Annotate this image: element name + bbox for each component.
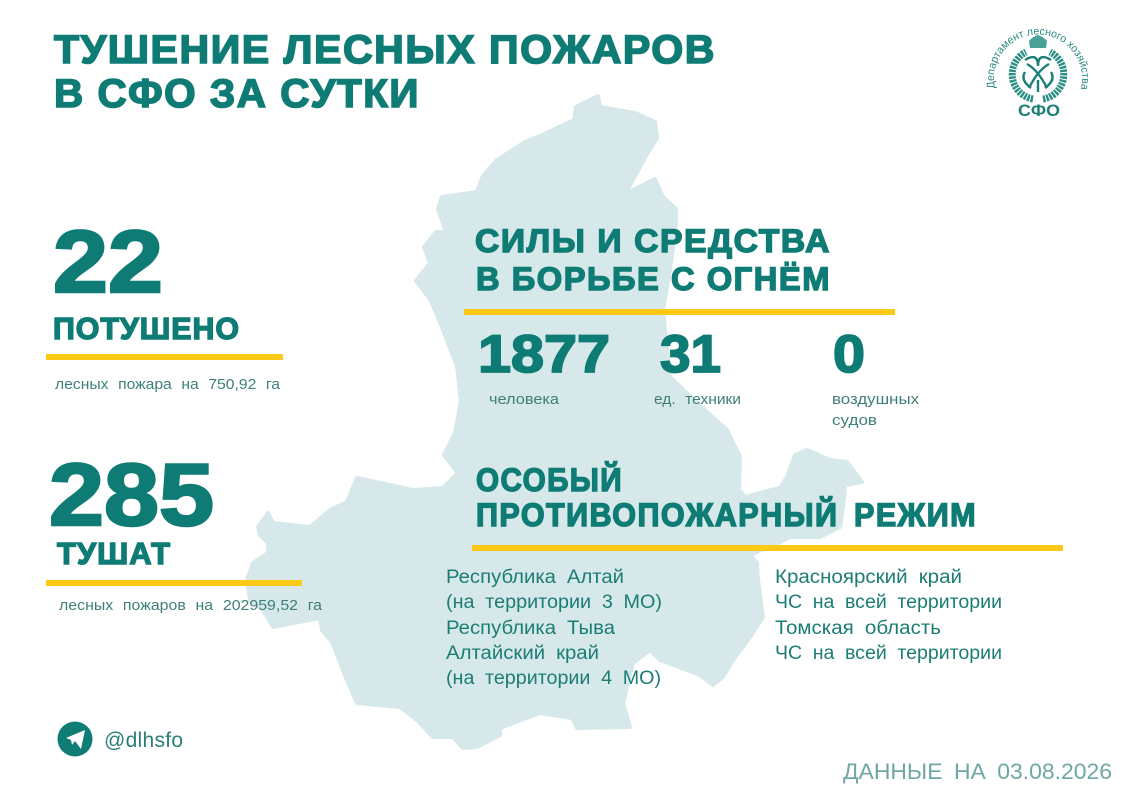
heading: special fire regime: ОСОБЫЙ [476, 462, 623, 498]
list: regions with special regime, right column: Томская область [775, 618, 941, 639]
heading: forces and means: СИЛЫ И СРЕДСТВА [475, 223, 831, 259]
heading: special fire regime [472, 462, 1063, 551]
heading: forces and means [464, 223, 895, 315]
list: regions with special regime, left column: Республика Алтай [446, 567, 624, 588]
stat: people: человека [489, 391, 560, 408]
stat: people: 1877 [478, 325, 610, 384]
title: ТУШЕНИЕ ЛЕСНЫХ ПОЖАРОВ [54, 28, 716, 72]
icon: telegram [58, 722, 92, 756]
emblem wreath [1012, 52, 1064, 99]
stat: vehicles: ед. техники [654, 391, 741, 408]
emblem crown [1029, 35, 1047, 48]
logo caption: Департамент лесного хозяйства [986, 28, 1088, 90]
stat: aircraft: воздушных [832, 391, 920, 408]
list: regions with special regime, left column: (на территории 4 МО) [446, 668, 661, 689]
region label: СФО [1018, 101, 1060, 120]
stat: active fires: 285 [49, 445, 214, 544]
title: В СФО ЗА СУТКИ [54, 72, 420, 116]
telegram handle [58, 722, 183, 756]
stat: aircraft [832, 325, 920, 429]
list: regions with special regime, left column: (на территории 3 МО) [446, 592, 662, 613]
stat: aircraft: 0 [833, 325, 865, 384]
stat: extinguished fires [46, 212, 283, 393]
stat: aircraft: судов [832, 412, 877, 429]
list: regions with special regime, left column [446, 567, 662, 689]
heading: special fire regime: ПРОТИВОПОЖАРНЫЙ РЕЖИМ [476, 497, 977, 533]
stat: extinguished fires: 22 [53, 212, 163, 311]
title [54, 28, 716, 116]
heading: forces and means: В БОРЬБЕ С ОГНЁМ [476, 261, 831, 297]
date stamp: ДАННЫЕ НА 03.08.2026 [843, 759, 1112, 784]
list: regions with special regime, right column: Красноярский край [775, 567, 962, 588]
stat: active fires [46, 445, 323, 614]
list: regions with special regime, left column: Алтайский край [446, 643, 599, 664]
stat: people [478, 325, 610, 408]
logo: forestry department emblem [986, 28, 1088, 120]
list: regions with special regime, left column: Республика Тыва [446, 618, 615, 639]
map: Siberian Federal District silhouette [247, 96, 862, 748]
stat: vehicles [654, 325, 741, 408]
list: regions with special regime, right column: ЧС на всей территории [775, 592, 1002, 613]
list: regions with special regime, right column [775, 567, 1002, 664]
stat: vehicles: 31 [660, 325, 721, 384]
stat: extinguished fires: лесных пожара на 750,92 га [55, 376, 281, 393]
telegram handle: @dlhsfo [104, 729, 183, 752]
list: regions with special regime, right column: ЧС на всей территории [775, 643, 1002, 664]
stat: active fires: ТУШАТ [57, 536, 171, 571]
stat: extinguished fires: ПОТУШЕНО [53, 311, 240, 346]
stat: active fires: лесных пожаров на 202959,52 га [59, 597, 323, 614]
